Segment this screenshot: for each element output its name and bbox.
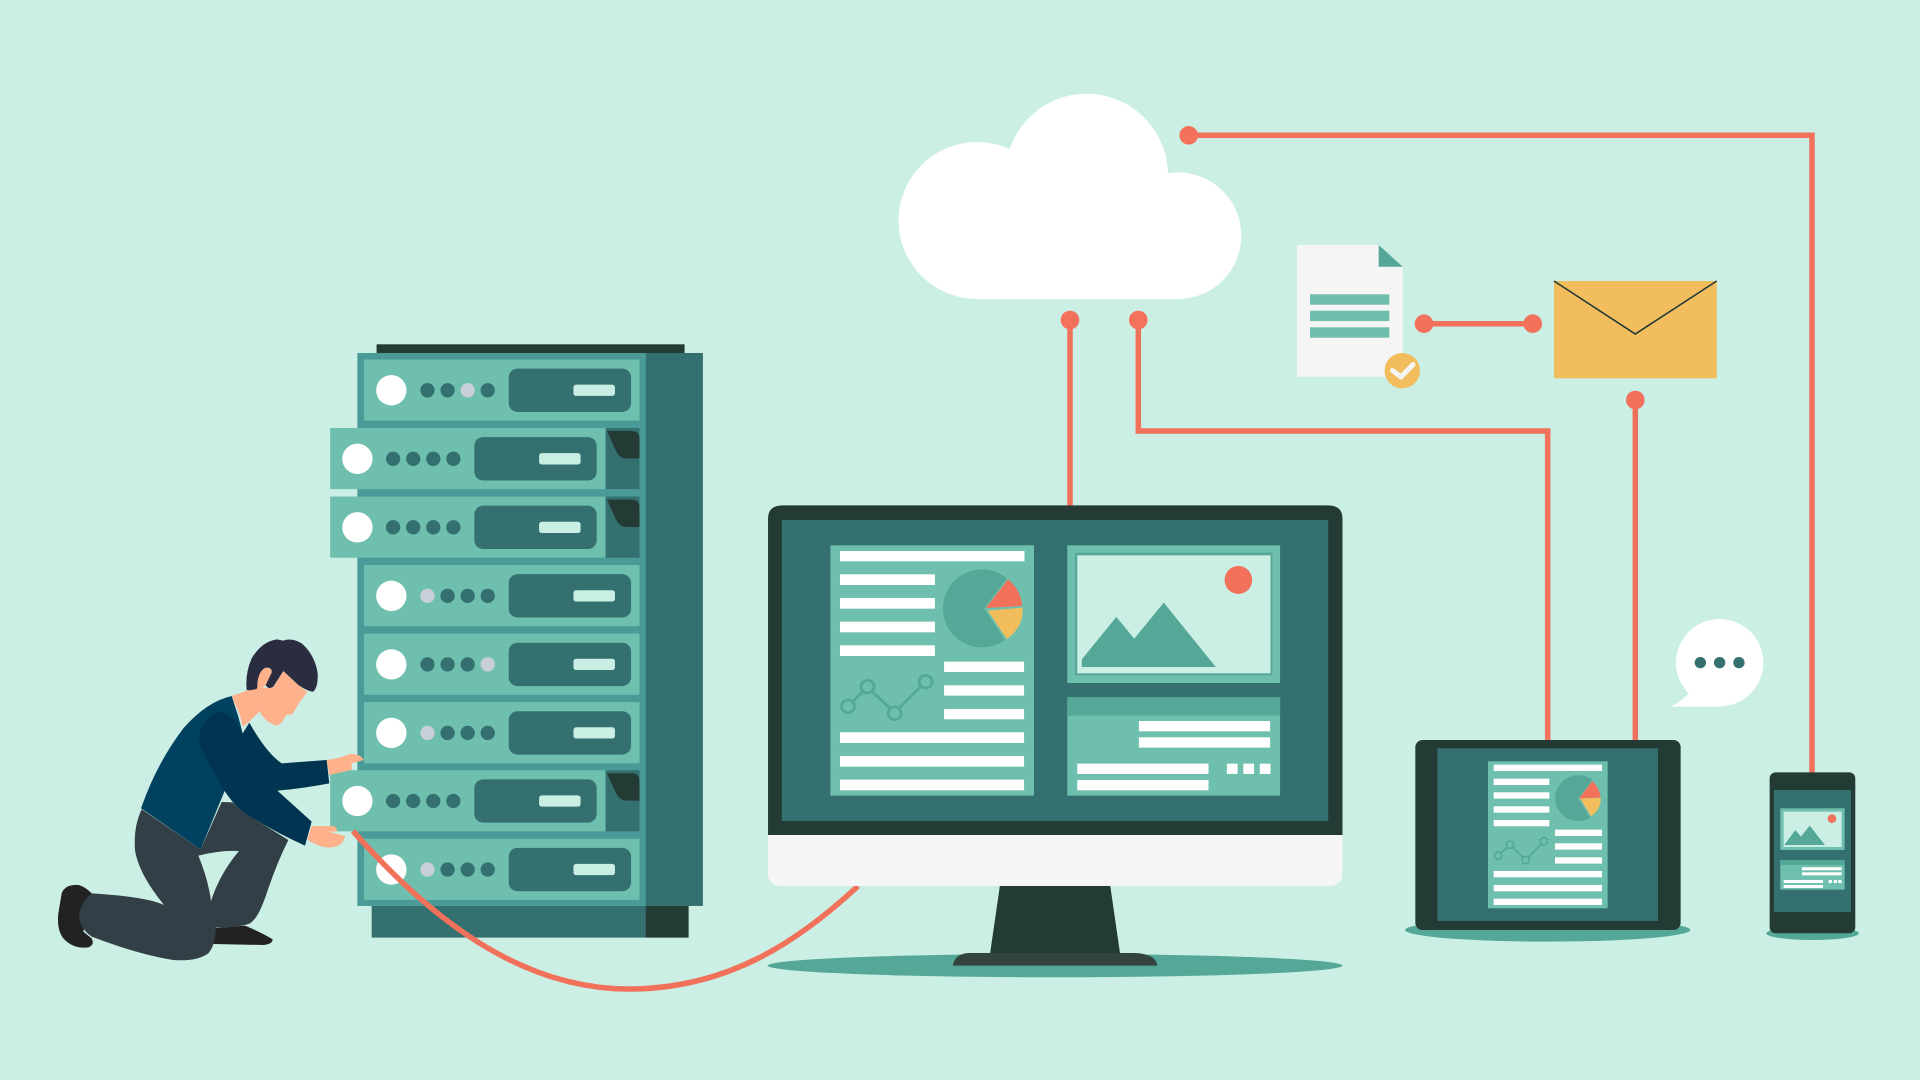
line: cloud to phone (1189, 135, 1812, 775)
monitor shadow (768, 954, 1342, 977)
panel: picture (1067, 545, 1280, 683)
server unit 7 pulled out (330, 770, 640, 831)
envelope icon (1554, 281, 1717, 378)
phone text card (1780, 860, 1845, 890)
tablet pie chart (1555, 775, 1601, 821)
foot (953, 953, 1157, 966)
check badge (1385, 353, 1420, 388)
connector lines (1070, 135, 1812, 775)
hand upper (327, 754, 364, 775)
server unit 2 pulled out (330, 428, 640, 489)
line: envelope to tablet (1633, 400, 1638, 742)
tablet (1405, 740, 1690, 942)
server unit 5 (364, 634, 640, 695)
ear (257, 668, 272, 689)
line chart (842, 675, 932, 720)
stand (990, 885, 1120, 954)
line: cloud to tablet (1138, 320, 1548, 742)
tablet line chart (1495, 838, 1548, 864)
server unit 6 (364, 702, 640, 763)
server unit 1 (364, 359, 640, 421)
bezel (768, 505, 1342, 835)
server unit 3 pulled out (330, 497, 640, 558)
hair (246, 639, 318, 692)
server unit 8 (364, 839, 640, 900)
trousers (79, 802, 288, 960)
jacket (141, 696, 243, 849)
desktop monitor (768, 505, 1342, 977)
screen (782, 520, 1328, 821)
phone picture card (1780, 808, 1845, 850)
server unit 4 (364, 565, 640, 626)
back shoe (58, 885, 93, 948)
line: cloud to monitor (1067, 320, 1073, 506)
phone (1766, 772, 1859, 940)
line: document to envelope (1424, 321, 1533, 326)
server rack (330, 344, 703, 938)
speech bubble (1671, 619, 1763, 707)
document icon (1297, 245, 1420, 388)
neck and face (232, 671, 307, 727)
technician kneeling (58, 639, 364, 960)
hand lower (307, 826, 345, 848)
panel: text card (1067, 697, 1280, 796)
arms (199, 712, 329, 846)
connector end dots (1061, 126, 1645, 409)
pie chart (943, 569, 1023, 647)
panel: report (830, 545, 1034, 796)
cloud (898, 94, 1241, 299)
front shoe (213, 926, 273, 945)
cable from server to monitor (353, 831, 858, 989)
chin (768, 833, 1342, 886)
